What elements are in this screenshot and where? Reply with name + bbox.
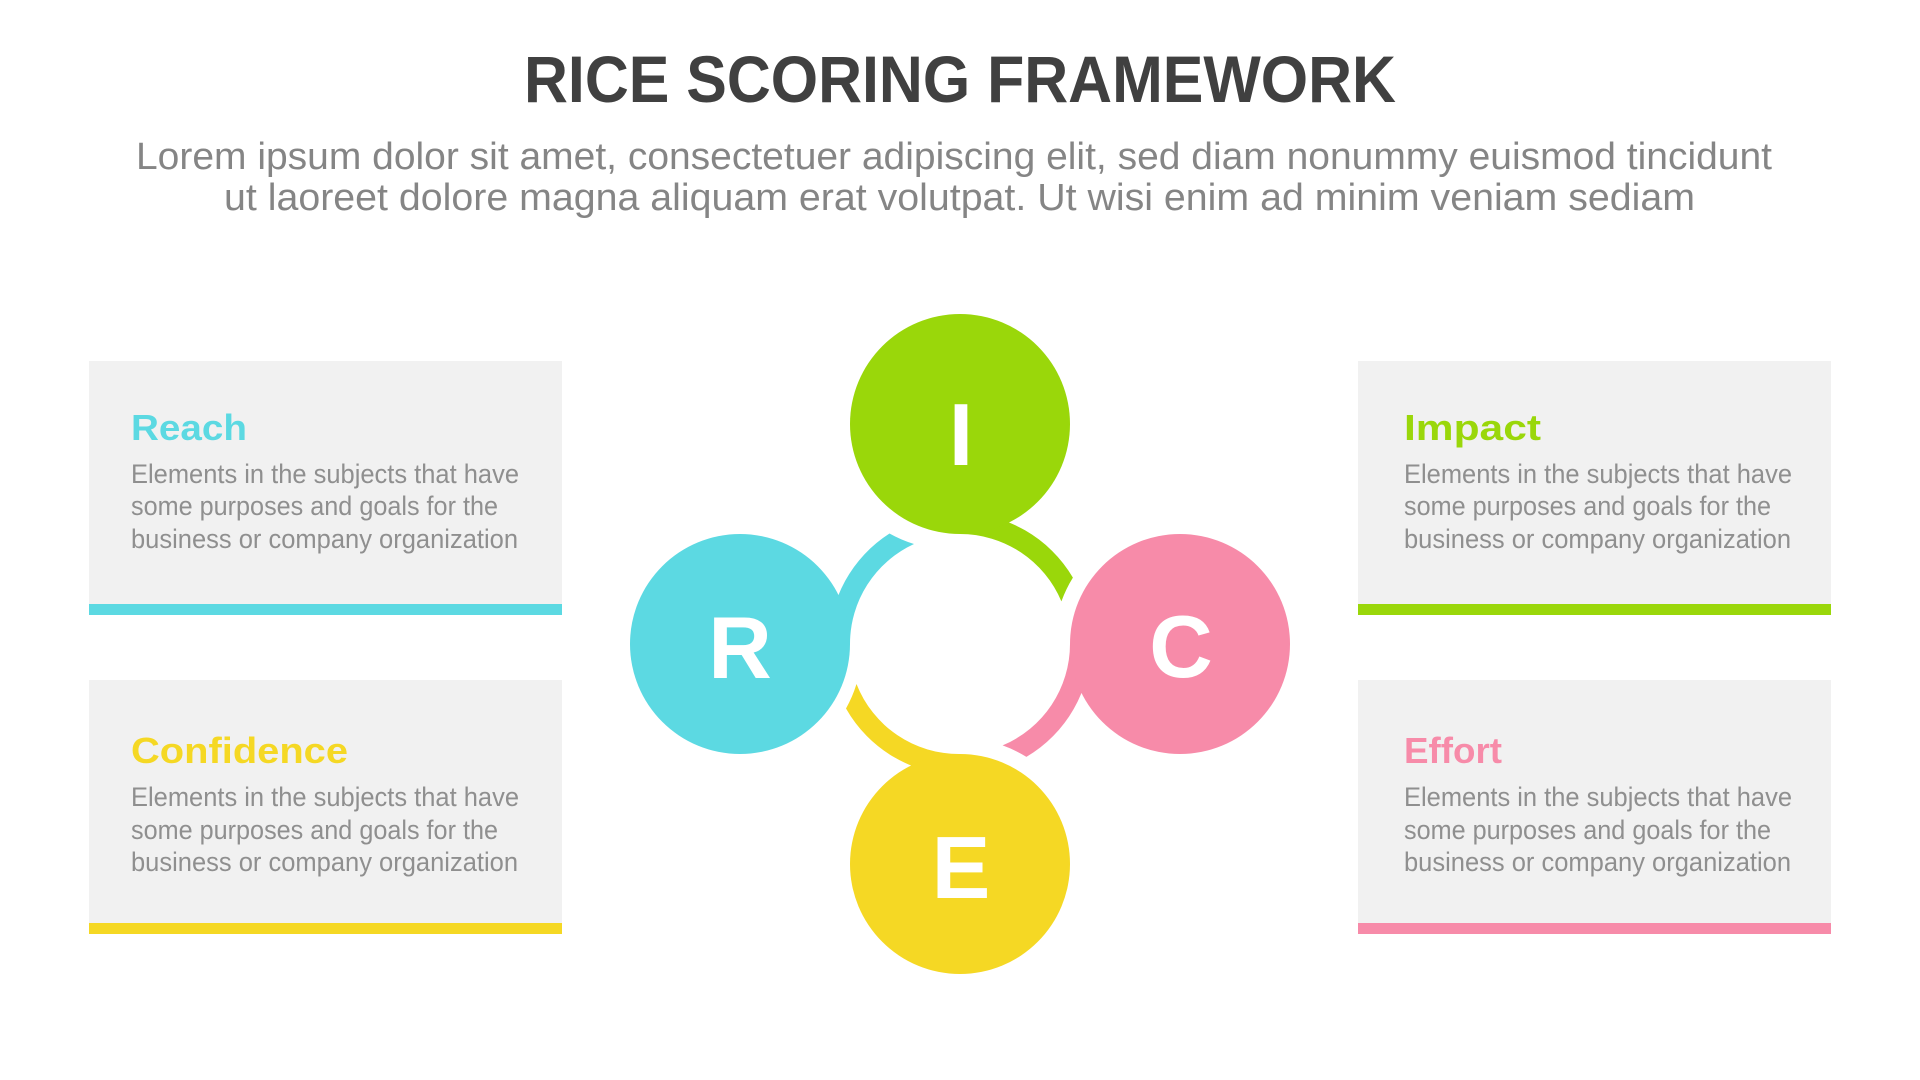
text: Reach description: Elements in the subjects that have	[131, 459, 519, 489]
circle: E	[850, 754, 1070, 974]
text: Reach description: business or company organization	[131, 524, 518, 554]
subtitle: ut laoreet dolore magna aliquam erat volutpat. Ut wisi enim ad minim veniam sediam	[224, 177, 1695, 219]
text: Impact description: some purposes and goals for the	[1404, 491, 1771, 521]
title: RICE SCORING FRAMEWORK	[524, 42, 1396, 116]
circle: R	[630, 534, 850, 754]
heading: Confidence: Confidence	[131, 730, 348, 771]
panel: Confidence	[89, 680, 562, 934]
panel: Reach	[89, 361, 562, 615]
heading: Effort: Effort	[1404, 730, 1502, 771]
circle: R: R	[708, 598, 772, 697]
arc: Confidence to Effort	[1003, 644, 1091, 757]
circle: C: C	[1149, 597, 1213, 696]
text: Confidence description: business or company organization	[131, 847, 518, 877]
text: Effort description: some purposes and goals for the	[1404, 815, 1771, 845]
circle: C	[1070, 534, 1290, 754]
circle: E: E	[932, 818, 990, 917]
text: Reach description	[131, 459, 519, 554]
subtitle: Lorem ipsum dolor sit amet, consectetuer adipiscing elit, sed diam nonummy euismod tincidunt	[136, 136, 1772, 178]
subtitle	[136, 136, 1772, 219]
circle: I	[850, 314, 1070, 534]
text: Effort description	[1404, 782, 1792, 877]
text: Impact description: Elements in the subjects that have	[1404, 459, 1792, 489]
text: Confidence description	[131, 782, 519, 877]
panel: Impact	[1358, 361, 1831, 615]
arc: Reach to Impact	[829, 534, 914, 644]
circle: I: I	[949, 385, 973, 484]
heading: Impact: Impact	[1404, 407, 1541, 448]
text: Effort description: Elements in the subjects that have	[1404, 782, 1792, 812]
chart: RICE circular cycle	[630, 314, 1290, 974]
heading: Reach: Reach	[131, 407, 247, 448]
text: Confidence description: Elements in the subjects that have	[131, 782, 519, 812]
text: Effort description: business or company organization	[1404, 847, 1791, 877]
text: Reach description: some purposes and goals for the	[131, 491, 498, 521]
arc: Impact to Confidence	[960, 513, 1073, 601]
text: Confidence description: some purposes and goals for the	[131, 815, 498, 845]
text: Impact description: business or company organization	[1404, 524, 1791, 554]
arc: Effort to Reach	[846, 684, 960, 775]
panel: Effort	[1358, 680, 1831, 934]
text: Impact description	[1404, 459, 1792, 554]
